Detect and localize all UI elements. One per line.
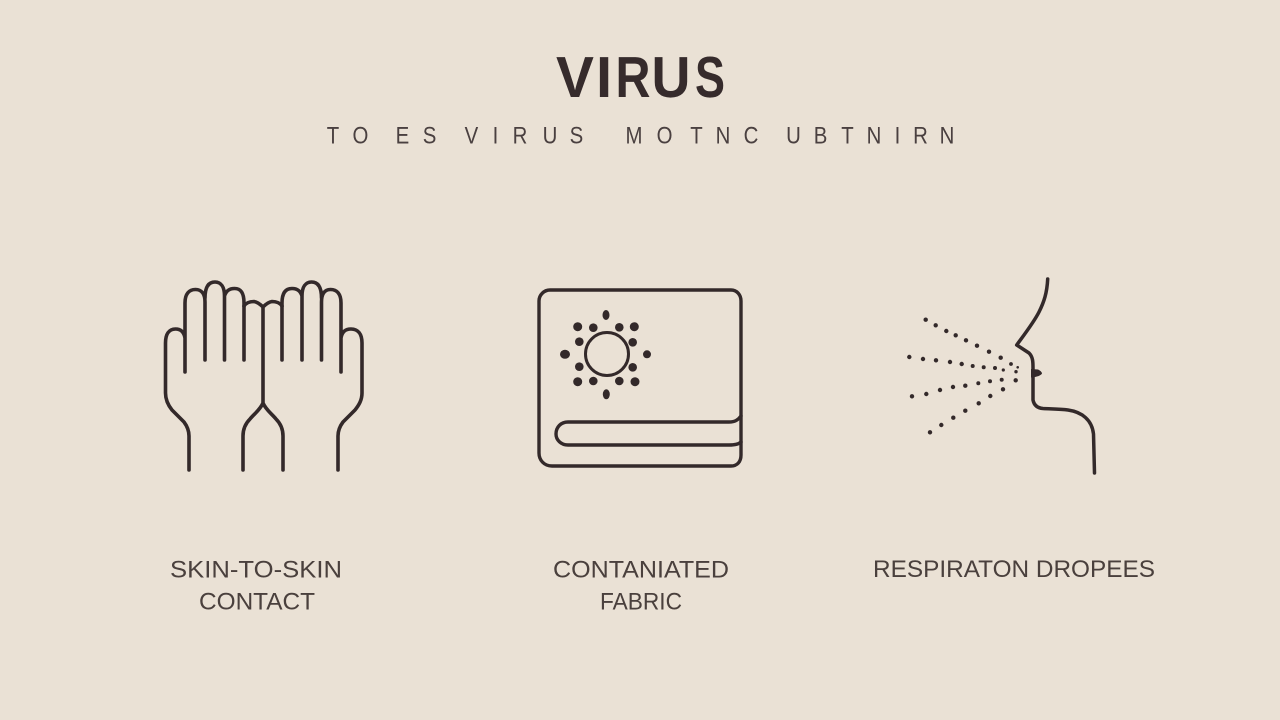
subtitle: UBTNIRN — [786, 122, 954, 149]
icon: contaminated fabric — [539, 290, 741, 466]
label: skin-to-skin contact: CONTACT — [199, 588, 315, 616]
label: contaminated fabric — [553, 556, 729, 616]
left hand outline — [166, 282, 244, 470]
label: contaminated fabric: FABRIC — [600, 588, 682, 616]
subtitle: TO — [327, 122, 368, 149]
title — [556, 45, 725, 110]
label: skin-to-skin contact — [170, 556, 342, 616]
right hand outline — [282, 282, 362, 470]
title: V — [556, 45, 594, 110]
icon: respiratory droplets from face profile — [907, 279, 1094, 473]
title: R — [616, 45, 650, 110]
lips — [1031, 369, 1042, 378]
shared centre fingers and wrists — [243, 302, 283, 470]
face profile — [1017, 279, 1094, 473]
fabric fold — [556, 416, 741, 445]
subtitle: ES — [396, 122, 436, 149]
title: U — [652, 45, 690, 110]
label: contaminated fabric: CONTANIATED — [553, 556, 729, 584]
droplet sprays — [907, 318, 1019, 434]
icon: two open hands — [166, 282, 362, 470]
folded fabric outline — [539, 290, 741, 466]
title: S — [695, 45, 725, 110]
label: skin-to-skin contact: SKIN-TO-SKIN — [170, 556, 342, 584]
subtitle: MOTNC — [626, 122, 758, 149]
title: I — [596, 45, 612, 110]
label: respiratory droplets: RESPIRATON DROPEES — [873, 556, 1155, 583]
subtitle — [327, 122, 954, 149]
virus particle — [560, 310, 651, 399]
subtitle: VIRUS — [465, 122, 583, 149]
